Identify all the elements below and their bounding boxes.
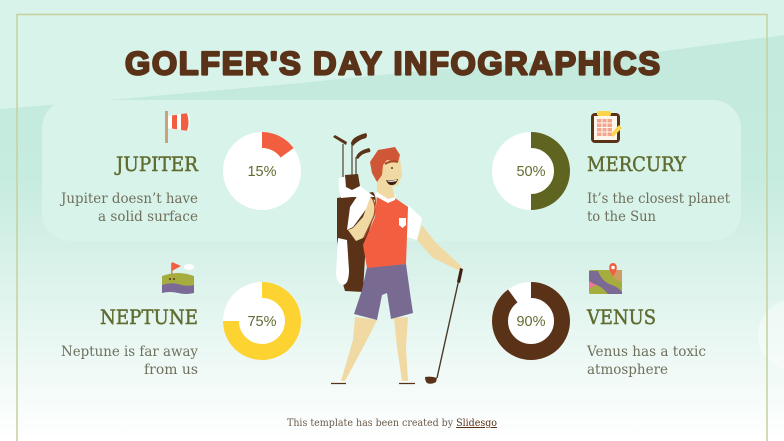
- panel: Neptune: [61, 262, 301, 378]
- text: Mercury description: It’s the closest planet: [587, 191, 731, 207]
- legs: [341, 317, 377, 381]
- text: Mercury description: to the Sun: [587, 209, 656, 225]
- heading: Venus: VENUS: [586, 305, 656, 329]
- arm right: [417, 225, 462, 270]
- text: Jupiter description: Jupiter doesn’t have: [59, 191, 198, 207]
- chart: Jupiter donut 15%: [223, 132, 301, 210]
- icon: scorecard clipboard: [591, 111, 622, 143]
- illustration: golfer with bag and club: [331, 133, 463, 384]
- shirt: [363, 195, 408, 268]
- text: Venus description: atmosphere: [587, 362, 668, 378]
- heading: Jupiter: JUPITER: [114, 152, 199, 176]
- text: Neptune description: Neptune is far away: [61, 344, 198, 360]
- title: GOLFER'S DAY INFOGRAPHICS: [125, 46, 660, 82]
- shorts: [354, 264, 413, 320]
- text: Neptune description: [61, 344, 198, 378]
- panel: Mercury: [492, 111, 731, 225]
- text: Neptune description: from us: [144, 362, 198, 378]
- panel: top highlighted band: [42, 100, 741, 241]
- chart: Mercury donut 50%: [492, 132, 570, 210]
- text: Jupiter description: [59, 191, 198, 225]
- panel: Venus: [492, 263, 706, 378]
- icon: golf clubs: [333, 133, 370, 177]
- panel: Jupiter: [59, 111, 301, 225]
- icon: golf club: [425, 268, 463, 384]
- chart: Jupiter donut 15%: 15%: [247, 164, 277, 180]
- chart: Venus donut 90%: [492, 282, 570, 360]
- neck and head: [377, 180, 395, 199]
- text: Venus description: Venus has a toxic: [586, 344, 706, 360]
- icon: golf green with flag: [162, 262, 194, 294]
- left sleeve and arm: [347, 192, 372, 230]
- text: Mercury description: [587, 191, 731, 225]
- chart: Neptune donut 75%: [223, 282, 301, 360]
- icon: windsock: [165, 111, 190, 143]
- heading: Mercury: MERCURY: [587, 152, 687, 176]
- chart: Venus donut 90%: 90%: [516, 314, 546, 330]
- heading: Neptune: NEPTUNE: [100, 305, 198, 329]
- chart: Neptune donut 75%: 75%: [247, 314, 277, 330]
- text: Jupiter description: a solid surface: [98, 209, 198, 225]
- chart: Mercury donut 50%: 50%: [516, 164, 546, 180]
- shoes: [331, 382, 415, 384]
- icon: course map with pin: [589, 263, 622, 294]
- white sleeve right: [407, 205, 422, 240]
- bag: [337, 192, 376, 292]
- text: Venus description: [586, 344, 706, 378]
- footer credit: This template has been created by Slidesgo: [287, 418, 497, 429]
